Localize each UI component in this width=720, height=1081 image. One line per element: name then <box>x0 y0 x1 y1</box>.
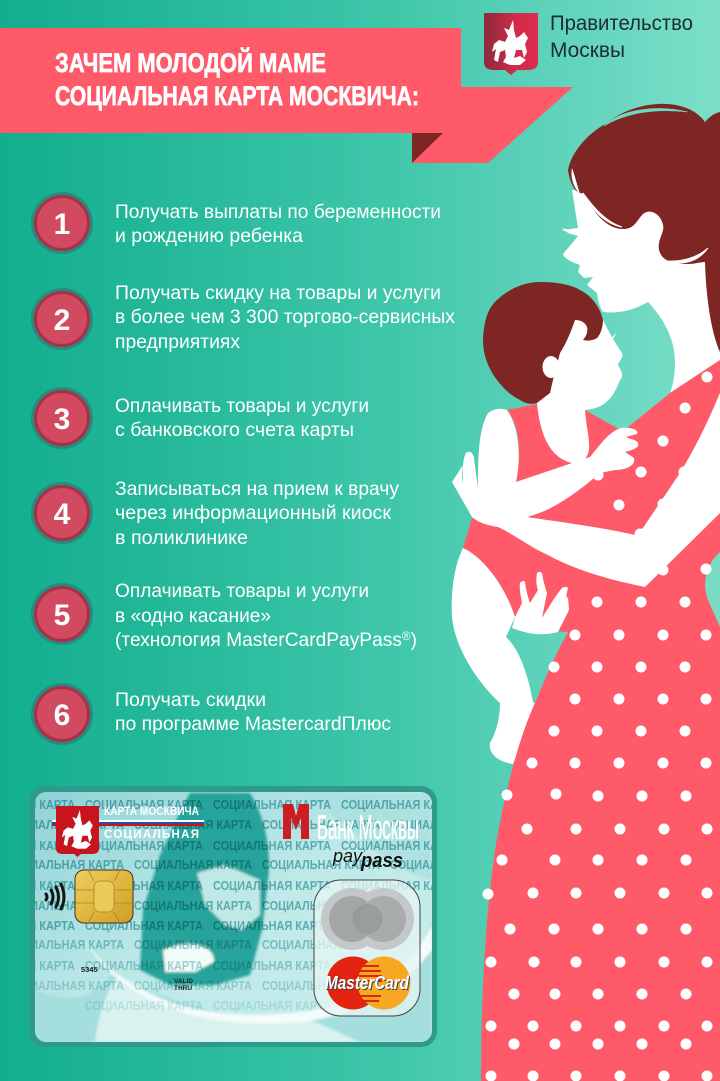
card background lettering: СОЦИАЛЬНАЯ КАРТА <box>341 798 459 812</box>
icon: Moscow shield <box>484 13 538 75</box>
baby eyelash <box>610 332 617 341</box>
card background lettering: СОЦИАЛЬНАЯ КАРТА <box>85 999 203 1013</box>
ribbon tail <box>412 87 573 163</box>
card background lettering: СОЦИАЛЬНАЯ КАРТА <box>213 839 331 853</box>
card background lettering: СОЦИАЛЬНАЯ КАРТА <box>134 899 252 913</box>
mastercard panel <box>314 880 420 1016</box>
item 6 <box>31 683 391 745</box>
number badge 5: 5 <box>54 599 70 632</box>
ribbon fold shadow <box>412 133 446 163</box>
hair highlights <box>571 108 708 263</box>
item 1 <box>31 192 441 254</box>
baby leg <box>452 548 536 764</box>
card background lettering: СОЦИАЛЬНАЯ КАРТА <box>390 818 508 832</box>
contactless icon <box>46 884 64 909</box>
white knight <box>62 810 93 849</box>
item 3 text: с банковского счета карты <box>115 419 354 441</box>
dress cutout background <box>705 552 720 627</box>
card background lettering: СОЦИАЛЬНАЯ КАРТА <box>6 938 124 952</box>
card background lettering: СОЦИАЛЬНАЯ КАРТА <box>134 858 252 872</box>
item 1 text <box>115 201 441 247</box>
organisation name: Правительство <box>550 12 693 35</box>
paypass logo: pay <box>332 846 363 866</box>
chip <box>75 870 133 923</box>
card background lettering: СОЦИАЛЬНАЯ КАРТА <box>341 879 459 893</box>
baby ear <box>542 356 560 378</box>
card background lettering: СОЦИАЛЬНАЯ КАРТА <box>213 879 331 893</box>
number badge 2: 2 <box>54 304 70 337</box>
item 4 text <box>115 478 399 549</box>
bank logo <box>283 804 419 847</box>
baby hair <box>483 282 603 404</box>
card frame <box>29 786 437 1047</box>
dress lower with romper <box>463 500 720 1081</box>
title banner <box>0 28 573 163</box>
title text <box>55 47 419 111</box>
card background lettering: СОЦИАЛЬНАЯ КАРТА <box>6 818 124 832</box>
card background lettering: СОЦИАЛЬНАЯ КАРТА <box>6 979 124 993</box>
title text: ЗАЧЕМ МОЛОДОЙ МАМЕ <box>55 47 326 78</box>
number badge 3 <box>31 387 93 449</box>
valid thru: THRU <box>174 985 192 992</box>
number badge 3: 3 <box>54 403 70 436</box>
tricolor stripe <box>52 820 204 822</box>
card background lettering: СОЦИАЛЬНАЯ КАРТА <box>341 839 459 853</box>
item 2 text: Получать скидку на товары и услуги <box>115 282 441 304</box>
item 6 text: по программе MastercardПлюс <box>115 713 391 735</box>
mastercard logo <box>325 956 411 1010</box>
hologram <box>321 888 414 950</box>
card background lettering <box>0 798 508 1013</box>
number badge 1: 1 <box>54 208 70 241</box>
card background lettering: СОЦИАЛЬНАЯ КАРТА <box>262 938 380 952</box>
item 5 text <box>115 580 417 651</box>
dress upper <box>527 360 720 537</box>
item 2 text: предприятиях <box>115 331 240 353</box>
polka dots <box>482 372 712 1081</box>
ribbon body <box>0 28 461 133</box>
item 2 <box>31 282 455 353</box>
item 1 text: Получать выплаты по беременности <box>115 201 441 223</box>
list of benefits <box>31 192 455 745</box>
card background lettering: СОЦИАЛЬНАЯ КАРТА <box>262 979 380 993</box>
card background lettering: СОЦИАЛЬНАЯ КАРТА <box>262 818 380 832</box>
card background lettering: СОЦИАЛЬНАЯ КАРТА <box>390 858 508 872</box>
valid thru <box>174 978 193 992</box>
mother arm <box>490 393 720 587</box>
baby romper top <box>507 404 626 482</box>
card background lettering: СОЦИАЛЬНАЯ КАРТА <box>262 858 380 872</box>
social card <box>29 786 437 1047</box>
illustration: mother and baby <box>452 104 720 1081</box>
card background lettering: СОЦИАЛЬНАЯ КАРТА <box>213 798 331 812</box>
card background lettering: СОЦИАЛЬНАЯ КАРТА <box>134 979 252 993</box>
item 3 text <box>115 395 369 441</box>
paypass logo: pass <box>360 850 403 872</box>
organisation name <box>550 12 693 62</box>
card face <box>35 792 432 1042</box>
card background lettering: СОЦИАЛЬНАЯ КАРТА <box>6 899 124 913</box>
item 5 text: ® <box>402 629 411 643</box>
card background lettering: СОЦИАЛЬНАЯ КАРТА <box>85 839 203 853</box>
item 4 text: через информационный киоск <box>115 502 391 524</box>
card background lettering: СОЦИАЛЬНАЯ КАРТА <box>85 919 203 933</box>
baby lower hand <box>512 572 569 634</box>
item 5 text: в «одно касание» <box>115 605 271 627</box>
card number: 5345 <box>81 965 98 974</box>
social card: Банк Москвы <box>317 809 419 847</box>
card background lettering: СОЦИАЛЬНАЯ КАРТА <box>85 879 203 893</box>
card background lettering: СОЦИАЛЬНАЯ КАРТА <box>213 999 331 1013</box>
bank M mark <box>283 804 309 839</box>
item 4 text: в поликлинике <box>115 527 248 549</box>
number badge 4: 4 <box>54 498 71 531</box>
number badge 1 <box>31 192 93 254</box>
card background lettering: СОЦИАЛЬНАЯ КАРТА <box>213 959 331 973</box>
item 2 text <box>115 282 455 353</box>
card background lettering: СОЦИАЛЬНАЯ КАРТА <box>85 798 203 812</box>
item 4 <box>31 478 399 549</box>
title text: СОЦИАЛЬНАЯ КАРТА МОСКВИЧА: <box>55 81 419 111</box>
number badge 2 <box>31 288 93 350</box>
item 4 text: Записываться на прием к врачу <box>115 478 399 500</box>
card type: СОЦИАЛЬНАЯ <box>104 829 199 841</box>
item 5 <box>31 580 417 651</box>
item 5 text: (технология MasterCardPayPass <box>115 629 407 651</box>
organisation name: Москвы <box>550 39 625 62</box>
mastercard logo: MasterCard <box>326 974 411 994</box>
number badge 5 <box>31 583 93 645</box>
number badge 4 <box>31 482 93 544</box>
valid thru: VALID <box>174 978 193 985</box>
card background lettering: СОЦИАЛЬНАЯ КАРТА <box>134 938 252 952</box>
mother hair <box>568 104 720 352</box>
card background lettering: СОЦИАЛЬНАЯ КАРТА <box>213 919 331 933</box>
card background lettering: СОЦИАЛЬНАЯ КАРТА <box>85 959 203 973</box>
card photo: mother and child <box>35 793 432 1042</box>
red shield <box>56 806 99 857</box>
item 6 text: Получать скидки <box>115 689 266 711</box>
card background lettering: СОЦИАЛЬНАЯ КАРТА <box>134 818 252 832</box>
item 2 text: в более чем 3 300 торгово-сервисных <box>115 306 455 328</box>
item 5 text: ) <box>411 629 417 651</box>
item 5 text: Оплачивать товары и услуги <box>115 580 369 602</box>
baby face and chest <box>537 320 622 463</box>
item 1 text: и рождению ребенка <box>115 225 303 247</box>
paypass logo <box>332 846 403 872</box>
mother face and neck <box>562 190 720 393</box>
number badge 6 <box>31 683 93 745</box>
card background lettering: СОЦИАЛЬНАЯ КАРТА <box>6 858 124 872</box>
item 3 text: Оплачивать товары и услуги <box>115 395 369 417</box>
item 6 text <box>115 689 391 735</box>
item 3 <box>31 387 369 449</box>
logo: Moscow government <box>484 12 693 75</box>
mastercard logo: MasterCard <box>325 973 410 993</box>
card logo: Карта москвича <box>52 806 204 857</box>
card name: КАРТА МОСКВИЧА <box>104 806 199 818</box>
number badge 6: 6 <box>54 699 70 732</box>
card background lettering: СОЦИАЛЬНАЯ КАРТА <box>262 899 380 913</box>
baby arm and mother hand <box>452 409 638 527</box>
mother eyelash <box>562 228 578 236</box>
